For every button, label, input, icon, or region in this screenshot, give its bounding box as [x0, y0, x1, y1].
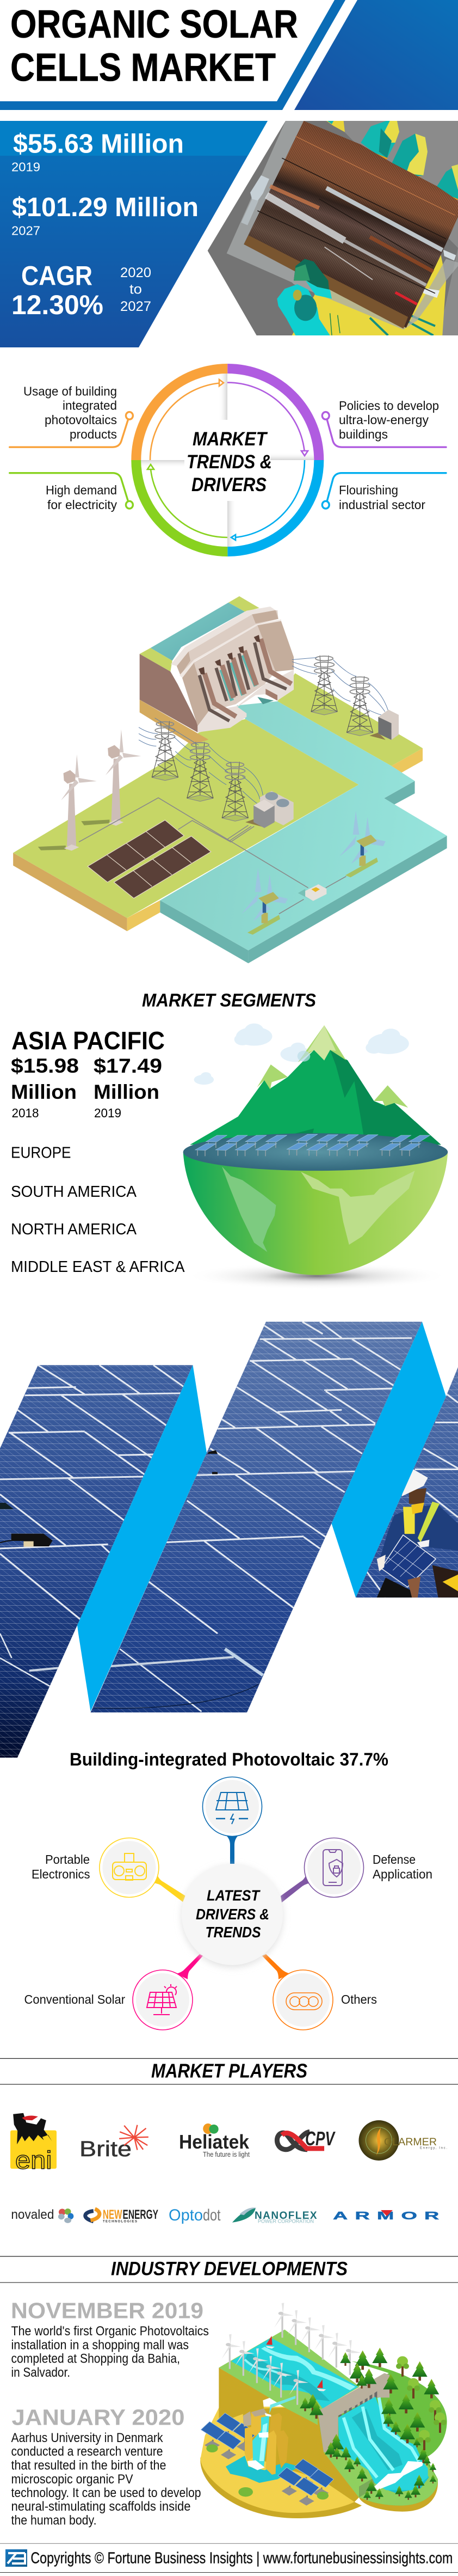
panel: market size stats: [0, 121, 268, 347]
logo: novaled: [11, 2207, 73, 2223]
text block: asia pacific figures: 2018: [12, 1106, 39, 1120]
worker holding a solar module: [377, 1470, 458, 1598]
land and water slabs: [13, 673, 447, 963]
river: [231, 2338, 358, 2414]
stat: CAGR: 2020: [120, 265, 151, 280]
logo: nanoflex: POWER CORPORATION: [258, 2218, 314, 2224]
logo: cpv: infinity: [308, 2147, 318, 2151]
hub label: DRIVERS &: [196, 1906, 269, 1923]
text block: asia pacific figures: Million: [11, 1081, 77, 1103]
icon: solar panel with bolt: [216, 1792, 248, 1824]
footer: [0, 2543, 458, 2572]
logo: nanoflex: [232, 2207, 317, 2224]
logo: heliatek: Heliatek: [179, 2131, 250, 2153]
driver: demand for electricity: [10, 473, 133, 512]
substations: [245, 709, 399, 828]
logo: brite: Brite: [79, 2137, 132, 2161]
stat: CAGR: 12.30%: [11, 290, 103, 320]
text block: other regions: EUROPE: [11, 1144, 71, 1161]
transmission towers: [152, 656, 373, 821]
stat: 2019 value: [11, 130, 184, 174]
ground cables: [79, 798, 346, 914]
header: blue chevron band: [0, 0, 345, 110]
dam and spillway: [318, 2373, 429, 2493]
text block: other regions: SOUTH AMERICA: [11, 1183, 137, 1201]
text block: other regions: [11, 1144, 185, 1276]
driver: ultra-low-energy policies: Policies to develop: [339, 399, 439, 413]
driver: industrial sector: industrial sector: [339, 498, 425, 512]
sail boats: [265, 2336, 326, 2391]
logo: new energy technologies: TECHNOLOGIES: [103, 2220, 137, 2224]
logo: eni: [10, 2113, 57, 2174]
ring: divider shadows: [141, 374, 314, 547]
power lines: [139, 658, 388, 804]
hub labels: [24, 1852, 432, 2006]
hemisphere: [183, 1152, 448, 1275]
logo: optodot: dot: [203, 2206, 221, 2224]
hub labels: Electronics: [32, 1867, 90, 1881]
text block: asia pacific figures: $17.49: [94, 1055, 162, 1077]
driver: ultra-low-energy policies: ultra-low-energy: [339, 413, 429, 427]
heading: market players: MARKET PLAYERS: [151, 2060, 307, 2082]
illustration: isometric renewable landscape with dam: [200, 2303, 447, 2518]
ring: centre label: DRIVERS: [191, 474, 267, 495]
text block: january 2020 development: that resulted in the birth of the: [11, 2458, 166, 2473]
logo: solarmer: OLARMER: [384, 2137, 437, 2148]
cable boxes on the left strip: [0, 1450, 218, 1547]
junction box: [298, 884, 326, 901]
logo: new energy technologies: [85, 2207, 158, 2224]
hub labels: Application: [373, 1867, 432, 1881]
illustration: green globe with mountains and solar panels: [183, 1024, 448, 1289]
stat: CAGR: 2027: [120, 299, 151, 314]
ring: centre label: TRENDS &: [187, 451, 272, 473]
hub centre: [182, 1864, 283, 1965]
hydro dam: [140, 596, 294, 745]
stat: 2027 value: 2027: [11, 224, 40, 238]
icon: speaker dock: [113, 1853, 146, 1880]
connector stems: [151, 1835, 313, 1979]
text block: asia pacific figures: [11, 1026, 165, 1120]
panel: market trends and drivers wheel: [10, 369, 446, 552]
stat: 2019 value: $55.63 Million: [13, 130, 184, 159]
node: others: [273, 1970, 333, 2030]
solar arrays: [201, 2413, 333, 2506]
hub labels: Portable: [45, 1852, 90, 1867]
driver: ultra-low-energy policies: buildings: [339, 427, 388, 441]
hub labels: Others: [341, 1992, 377, 2006]
driver: industrial sector: Flourishing: [339, 483, 398, 497]
heading: market segments: MARKET SEGMENTS: [142, 990, 316, 1011]
node: building-integrated photovoltaic: [202, 1777, 262, 1836]
logo: brite: [79, 2125, 148, 2161]
clouds: [194, 1024, 409, 1085]
stat: CAGR: CAGR: [21, 260, 92, 291]
logo: optodot: Opto: [169, 2206, 203, 2224]
cyan band right: [332, 1322, 446, 1598]
node: defense application: [305, 1838, 363, 1897]
text block: january 2020 development: JANUARY 2020: [12, 2404, 185, 2430]
ring: four coloured quadrants: [136, 369, 319, 552]
hub label: TRENDS: [206, 1924, 261, 1941]
stat: CAGR: [11, 260, 151, 320]
ring: centre label: MARKET: [193, 429, 268, 450]
panel: market player logos: [10, 2113, 447, 2224]
bushes: [206, 2444, 329, 2500]
heading: building-integrated photovoltaic share: Building-integrated Photovoltaic 37.7%: [70, 1749, 388, 1770]
node: portable electronics: [100, 1838, 159, 1897]
stat: CAGR: to: [129, 282, 142, 297]
globe shadow: [185, 1263, 448, 1289]
title: ORGANIC SOLAR: [10, 3, 298, 46]
photo: organic solar film held in gloves: [207, 121, 458, 335]
panel frames: [0, 1322, 458, 1633]
text block: november 2019 development: installation in a shopping mall was: [11, 2338, 189, 2352]
node: conventional solar: [133, 1970, 193, 2030]
text block: november 2019 development: in Salvador.: [11, 2365, 70, 2380]
driver: building integrated photovoltaics: Usage of building: [23, 384, 117, 398]
text block: january 2020 development: microscopic organic PV: [11, 2472, 133, 2487]
driver: building integrated photovoltaics: photovoltaics: [45, 413, 117, 427]
driver: building integrated photovoltaics: products: [70, 427, 117, 441]
footer logo: [5, 2549, 27, 2567]
photo: solar panel field in angled strips: [0, 1318, 458, 1764]
left strip: [0, 1365, 193, 1758]
solar arrays: [88, 820, 211, 898]
logo: armor: ARMOR: [333, 2210, 446, 2222]
mountains: [190, 1025, 441, 1145]
logo: optodot: [169, 2206, 221, 2224]
illustration: isometric renewable energy grid: [13, 596, 447, 963]
middle strip: [90, 1322, 422, 1712]
text block: november 2019 development: NOVEMBER 2019: [11, 2298, 203, 2323]
logo: heliatek: The future is light: [203, 2150, 250, 2158]
solar panel field: [195, 1134, 430, 1156]
stat: 2019 value: 2019: [11, 160, 40, 174]
icon: three dots in capsule: [286, 1993, 322, 2010]
hub shadow: [182, 1867, 282, 1967]
icon: phone with shield: [323, 1850, 343, 1886]
text block: november 2019 development: completed at Shopping da Bahia,: [11, 2352, 180, 2366]
forest: [300, 2348, 447, 2500]
disc top: [183, 1133, 448, 1171]
logo: cpv: [277, 2127, 336, 2151]
text block: january 2020 development: [11, 2404, 201, 2528]
wind farm: [221, 2303, 361, 2405]
text block: january 2020 development: the human body.: [11, 2513, 97, 2528]
text block: other regions: MIDDLE EAST & AFRICA: [11, 1258, 185, 1276]
title: CELLS MARKET: [10, 46, 276, 89]
lower panel frames: [0, 1633, 263, 1711]
text block: asia pacific figures: Million: [94, 1081, 159, 1103]
back solar array: [233, 2423, 257, 2451]
logo: novaled: novaled: [11, 2207, 54, 2222]
driver: building integrated photovoltaics: integrated: [63, 399, 117, 413]
icon: solar panel and sun: [147, 1984, 177, 2015]
logo: solarmer: [359, 2120, 447, 2161]
hub labels: Defense: [373, 1852, 416, 1867]
logo: eni: eni: [15, 2146, 52, 2174]
title: [10, 3, 298, 89]
wind turbines on land: [38, 730, 141, 850]
small waterfall and rocks: [226, 2408, 299, 2483]
logo: nanoflex: NANOFLEX: [255, 2210, 317, 2222]
hub label: [196, 1887, 269, 1941]
text block: january 2020 development: Aarhus University in Denmark: [11, 2431, 163, 2445]
continents: [222, 1167, 415, 1252]
driver: ultra-low-energy policies: [322, 399, 446, 447]
cyan band left: [77, 1365, 207, 1711]
text block: asia pacific figures: ASIA PACIFIC: [11, 1026, 165, 1055]
text block: january 2020 development: neural-stimulating scaffolds inside: [11, 2499, 190, 2514]
ring: inner arrows: [147, 380, 308, 540]
header: blue corner panel: [294, 0, 458, 110]
tidal turbines: [242, 811, 386, 935]
text block: january 2020 development: conducted a research venture: [11, 2444, 163, 2459]
text block: asia pacific figures: $15.98: [11, 1055, 79, 1077]
right strip: [356, 1367, 458, 1598]
logo: armor: [333, 2210, 446, 2222]
driver: demand for electricity: for electricity: [47, 498, 117, 512]
text block: other regions: NORTH AMERICA: [11, 1221, 137, 1238]
driver: industrial sector: [322, 473, 446, 512]
hub label: LATEST: [207, 1887, 261, 1904]
stat: 2027 value: [11, 193, 199, 238]
logo: new energy technologies: ENERGY: [123, 2207, 158, 2222]
driver: demand for electricity: High demand: [46, 483, 117, 497]
text block: november 2019 development: The world's first Organic Photovoltaics: [11, 2324, 209, 2339]
terrain: [200, 2329, 447, 2518]
ring: centre label: [187, 429, 272, 495]
text block: november 2019 development: [11, 2298, 209, 2380]
text block: january 2020 development: technology. It can be used to develop: [11, 2486, 201, 2500]
logo: heliatek: [179, 2124, 250, 2158]
logo: solarmer: Energy, Inc.: [420, 2147, 447, 2150]
text block: asia pacific figures: 2019: [94, 1106, 121, 1120]
hub labels: Conventional Solar: [24, 1992, 125, 2006]
logo: new energy technologies: NEW: [103, 2207, 122, 2222]
logo: cpv: CPV: [305, 2127, 336, 2150]
heading: industry developments: INDUSTRY DEVELOPMENTS: [111, 2259, 348, 2279]
stat: 2027 value: $101.29 Million: [12, 193, 199, 222]
driver: building integrated photovoltaics: [10, 384, 133, 447]
diagram: latest drivers and trends hub: [24, 1777, 432, 2030]
